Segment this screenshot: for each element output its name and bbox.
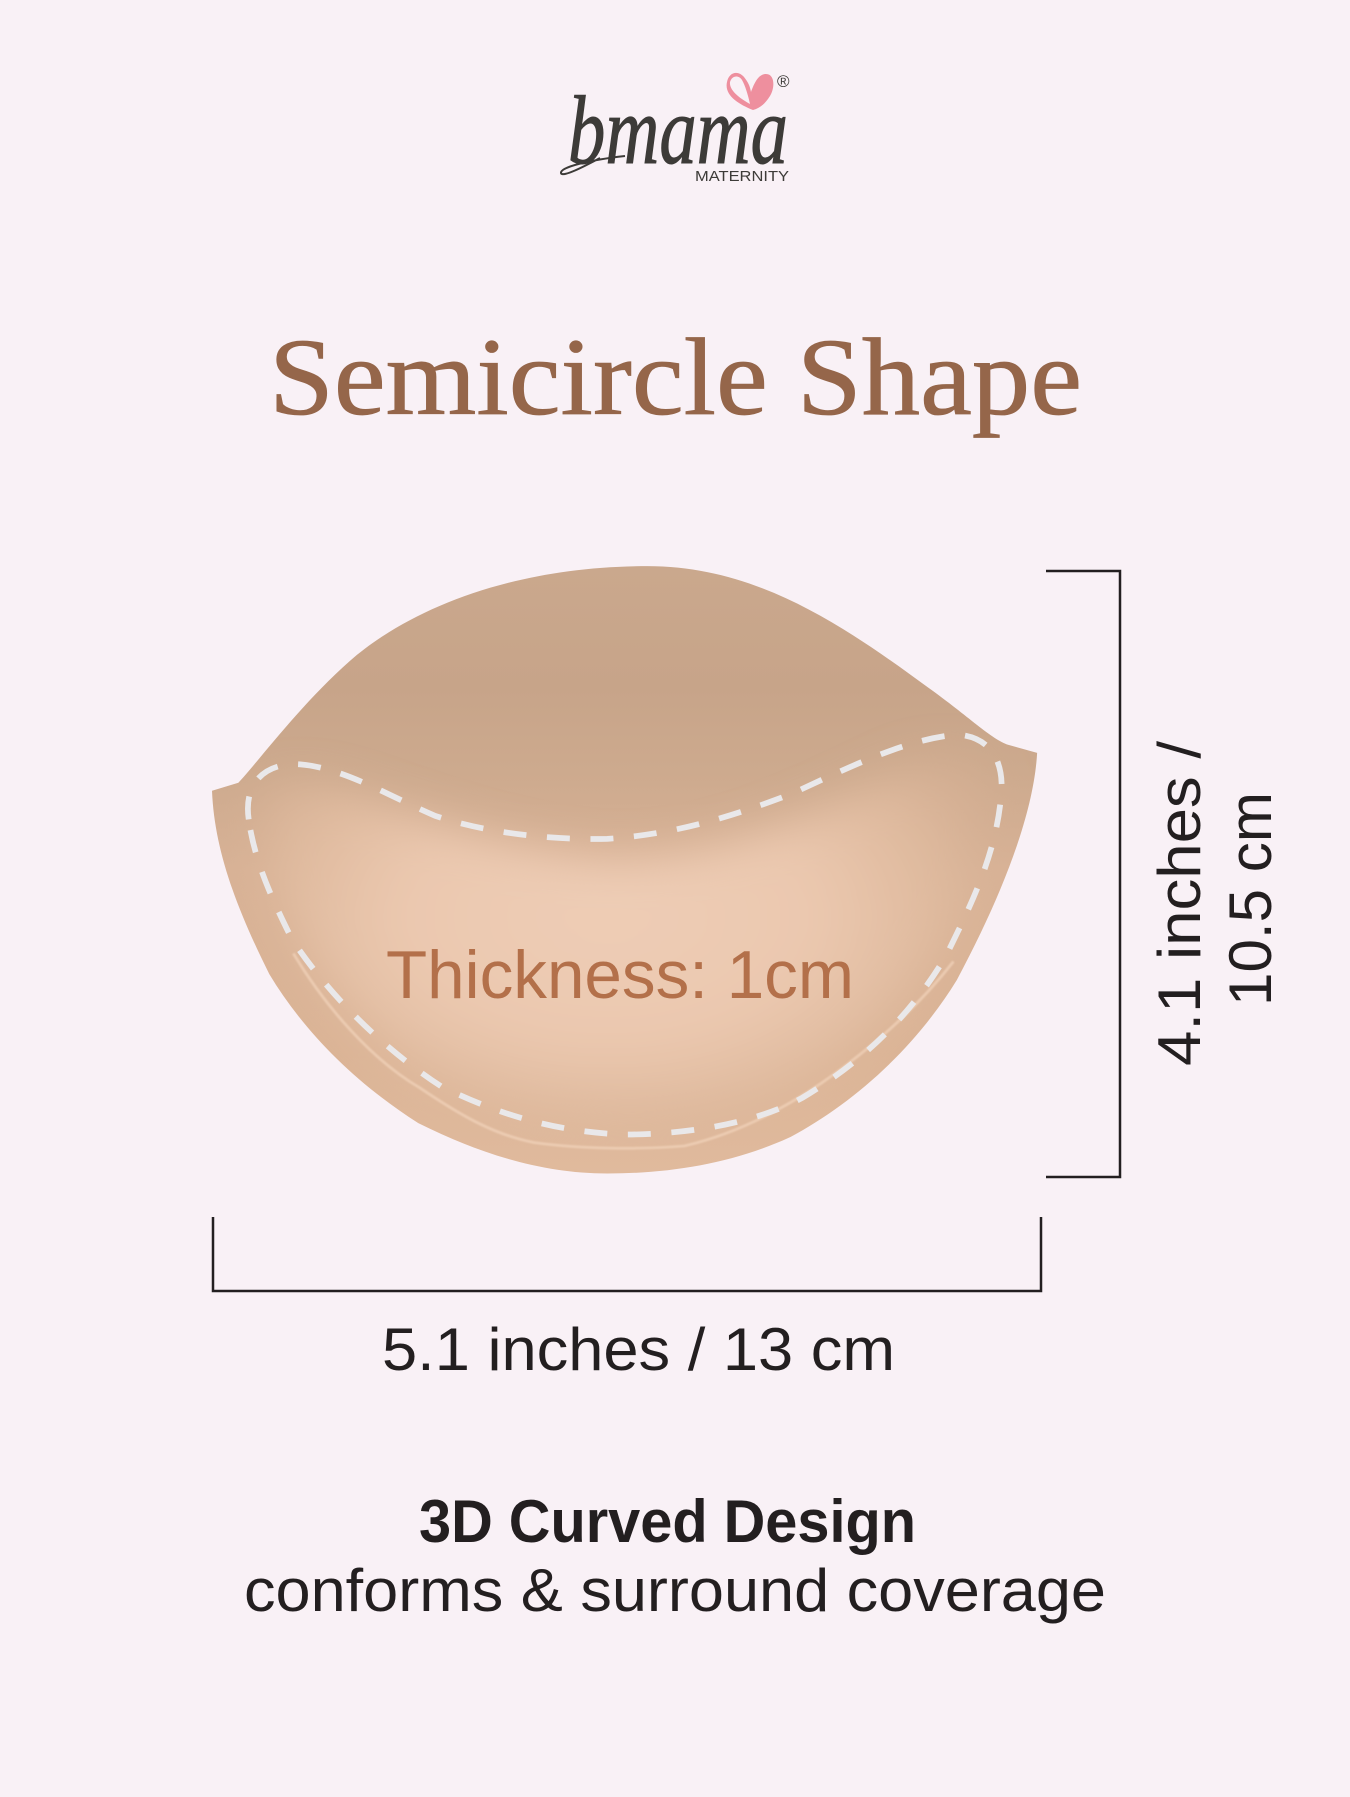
height dimension bracket	[1046, 571, 1120, 1177]
logo swash	[561, 156, 625, 174]
pad outline	[212, 566, 1037, 1174]
logo subtitle: MATERNITY	[695, 169, 789, 185]
bra pad illustration	[212, 566, 1037, 1174]
width dimension bracket	[213, 1217, 1041, 1291]
pad inner cup shading	[286, 783, 934, 1102]
width dimension label: 5.1 inches / 13 cm	[382, 1316, 895, 1383]
thickness label: Thickness: 1cm	[386, 937, 854, 1013]
height in inches: 4.1 inches /	[1146, 741, 1213, 1066]
logo wordmark: bmama	[568, 77, 788, 185]
logo: bmama maternity	[561, 72, 790, 185]
logo registered mark: ®	[777, 72, 790, 91]
design heading: 3D Curved Design	[419, 1488, 916, 1555]
height dimension label	[1146, 741, 1284, 1066]
logo icon: heart	[727, 73, 773, 110]
design description: conforms & surround coverage	[244, 1557, 1106, 1624]
height in centimetres: 10.5 cm	[1217, 792, 1284, 1006]
infographic canvas	[212, 72, 1272, 1624]
pad rim highlight	[293, 953, 953, 1148]
logo heart inner cut-out	[730, 76, 750, 104]
title: Semicircle Shape	[269, 316, 1082, 438]
stitching dashed line	[248, 735, 1002, 1135]
